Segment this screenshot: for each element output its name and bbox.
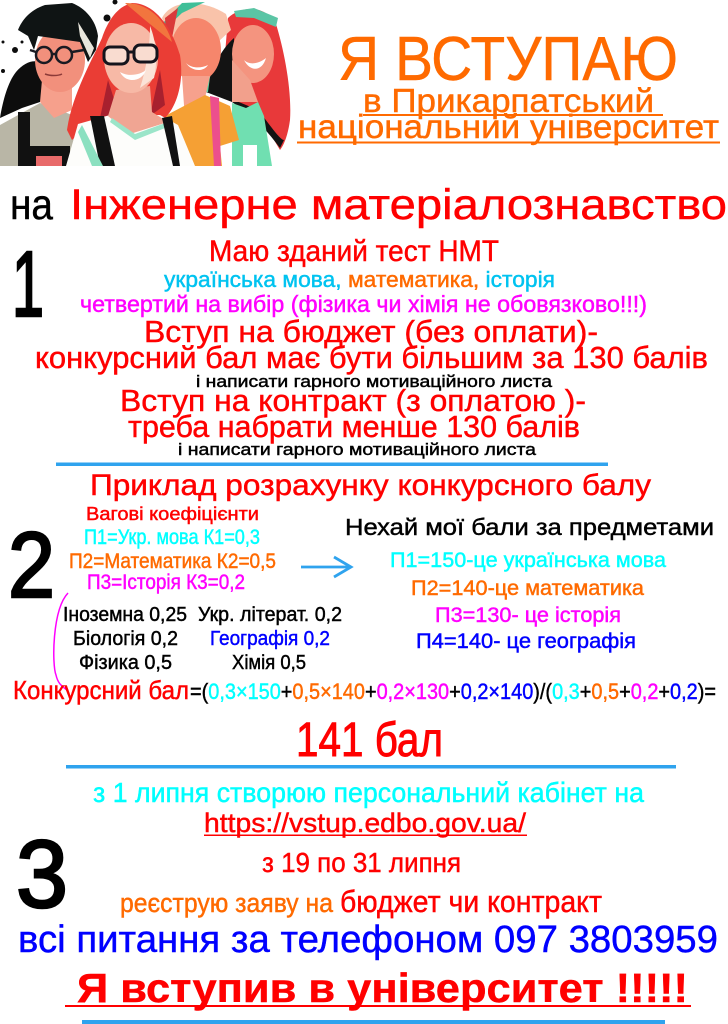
step 1 text: Вступ на бюджет (без оплати)-	[144, 314, 598, 349]
weight coefficients	[69, 504, 276, 594]
step 1 text: Маю зданий тест НМТ	[209, 235, 499, 268]
other subject weights: Фізика 0,5	[79, 652, 172, 674]
my scores: П2=140-це математика	[411, 577, 644, 600]
illustration: four students	[0, 0, 290, 166]
other subject weights: Біологія 0,2	[73, 628, 178, 650]
other subject weights	[63, 604, 342, 674]
weight coefficients: П1=Укр. мова К1=0,3	[84, 526, 260, 549]
result: 141 бал	[296, 714, 443, 767]
step 3 text: з 1 липня створюю персональний кабінет на	[93, 777, 644, 808]
step number 3: 3	[16, 821, 68, 928]
formula	[13, 675, 716, 705]
student 2	[66, 3, 195, 166]
other subject weights: Географія 0,2	[210, 628, 330, 650]
formula: Конкурсний бал	[13, 675, 189, 705]
student 4	[196, 8, 290, 166]
phone: всі питання за телефоном 097 3803959	[18, 919, 718, 961]
specialty heading: Інженерне матеріалознавство	[70, 181, 727, 229]
step 1 text: четвертий на вибір (фізика чи хімія не обовязково!!!)	[80, 291, 647, 317]
step 1 text	[35, 235, 708, 459]
title: національний університет	[298, 108, 719, 145]
my scores: П4=140- це географія	[416, 630, 636, 653]
title: в Прикарпатський	[363, 82, 654, 119]
my scores	[345, 514, 714, 653]
step 1 text: українська мова, математика, історія	[164, 267, 555, 292]
step 3 text: https://vstup.edbo.gov.ua/	[204, 808, 527, 838]
other subject weights: Хімія 0,5	[232, 652, 306, 674]
step 2 heading: Приклад розрахунку конкурсного балу	[90, 469, 651, 502]
step 1 text: конкурсний бал має бути більшим за 130 балів	[35, 340, 708, 375]
step 3 text	[93, 777, 644, 919]
my scores: П1=150-це українська мова	[390, 549, 666, 572]
weight coefficients: П2=Математика К2=0,5	[69, 550, 276, 573]
step 3 text: бюджет чи контракт	[340, 884, 602, 919]
step 3 text: реєструю заяву на	[120, 888, 334, 918]
title: Я ВСТУПАЮ	[338, 25, 678, 94]
my scores: Нехай мої бали за предметами	[345, 514, 714, 540]
step 1 text: треба набрати менше 130 балів	[128, 409, 580, 444]
step 1 text: Вступ на контракт (з оплатою )-	[120, 383, 586, 418]
step 1 text: і написати гарного мотиваційного листа	[196, 372, 553, 391]
bracket	[54, 593, 68, 691]
formula: =(0,3×150+0,5×140+0,2×130+0,2×140)/(0,3+0,5+0,2+0,2)=	[190, 679, 716, 704]
student 3	[162, 2, 239, 166]
step 1 text: і написати гарного мотиваційного листа	[178, 440, 537, 459]
step number 2: 2	[8, 513, 55, 617]
weight coefficients: П3=Історія К3=0,2	[87, 571, 245, 594]
specialty heading: на	[10, 181, 53, 229]
step 3 text: з 19 по 31 липня	[262, 847, 461, 878]
my scores: П3=130- це історія	[435, 604, 621, 627]
other subject weights: Укр. літерат. 0,2	[198, 604, 342, 626]
student 1	[0, 3, 98, 166]
other subject weights: Іноземна 0,25	[63, 604, 187, 626]
weight coefficients: Вагові коефіцієнти	[86, 504, 259, 524]
title	[297, 25, 720, 145]
ink splatter	[0, 0, 118, 118]
closing line: Я вступив в університет !!!!!	[77, 965, 688, 1011]
arrow	[301, 557, 351, 577]
step number 1: 1	[12, 232, 44, 336]
